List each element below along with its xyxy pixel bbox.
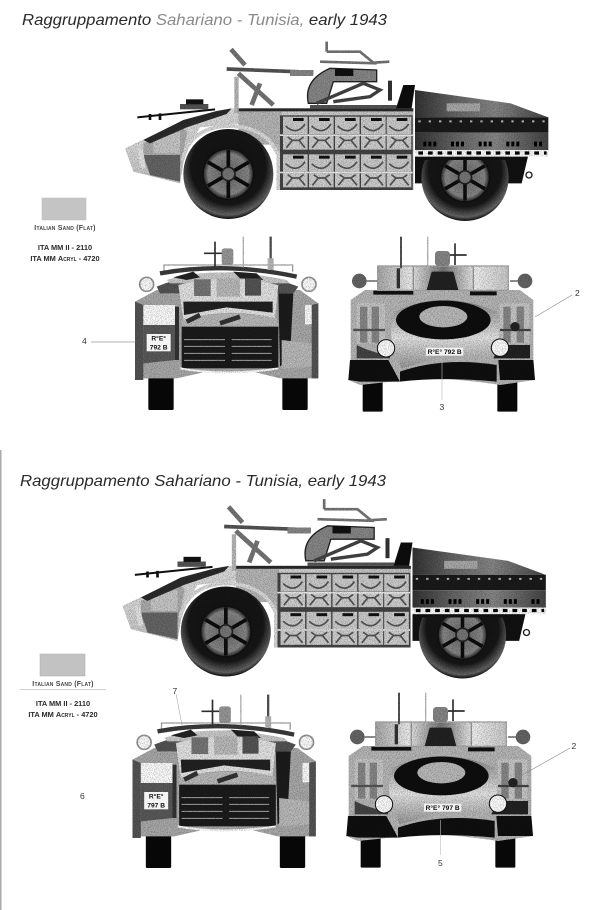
section 2 colour legend bbox=[20, 654, 106, 719]
section 1 title: Raggruppamento Sahariano - Tunisia, early 1943 bbox=[22, 12, 387, 29]
paint reference codes bbox=[28, 699, 98, 719]
swatch name: Italian Sand (Flat) bbox=[32, 681, 94, 688]
section 1 front view of vehicle bbox=[135, 237, 318, 410]
callout 3: 3 bbox=[440, 402, 444, 412]
section 2 title: Raggruppamento Sahariano - Tunisia, early 1943 bbox=[20, 473, 386, 490]
callout 7 bbox=[172, 686, 182, 725]
callout 2 second section: 2 bbox=[572, 741, 576, 751]
callout 5: 5 bbox=[438, 858, 443, 868]
paint reference codes bbox=[30, 243, 100, 263]
front number plate: R°E° bbox=[151, 334, 166, 342]
callout 2 bbox=[535, 288, 580, 317]
callout 2 second section bbox=[517, 741, 576, 778]
front number plate: R°E° bbox=[149, 792, 164, 800]
colour swatch: Italian Sand bbox=[40, 654, 85, 676]
front number plate: 792 B bbox=[150, 345, 168, 352]
left page edge bbox=[0, 450, 2, 910]
rear number plate: R°E° 792 B bbox=[428, 348, 462, 356]
swatch name: Italian Sand (Flat) bbox=[34, 225, 96, 232]
paint reference codes: ITA MM II - 2110 bbox=[38, 243, 92, 252]
front number plate bbox=[147, 334, 171, 352]
colour swatch: Italian Sand bbox=[42, 198, 86, 220]
callout 4: 4 bbox=[82, 336, 87, 346]
rear number plate: R°E° 797 B bbox=[426, 804, 460, 812]
paint reference codes: ITA MM II - 2110 bbox=[36, 699, 90, 708]
paint reference codes: ITA MM Acryl - 4720 bbox=[28, 710, 98, 719]
callout 6: 6 bbox=[80, 791, 85, 801]
section 1 colour legend bbox=[30, 198, 100, 263]
callout 7: 7 bbox=[172, 686, 178, 696]
section 2 side view of vehicle bbox=[122, 499, 546, 678]
front number plate: 797 B bbox=[147, 803, 165, 810]
callout 2: 2 bbox=[575, 288, 580, 298]
front number plate bbox=[144, 792, 168, 810]
section 1 side view of vehicle bbox=[125, 42, 548, 221]
section 1 rear view of vehicle bbox=[348, 237, 535, 412]
section 2 front view of vehicle bbox=[132, 695, 316, 868]
section 2 rear view of vehicle bbox=[346, 693, 533, 868]
callout 5 bbox=[438, 820, 443, 868]
divider rule bbox=[20, 688, 106, 691]
callout 4 bbox=[82, 336, 136, 346]
paint reference codes: ITA MM Acryl - 4720 bbox=[30, 254, 100, 263]
callout 3 bbox=[440, 358, 444, 412]
